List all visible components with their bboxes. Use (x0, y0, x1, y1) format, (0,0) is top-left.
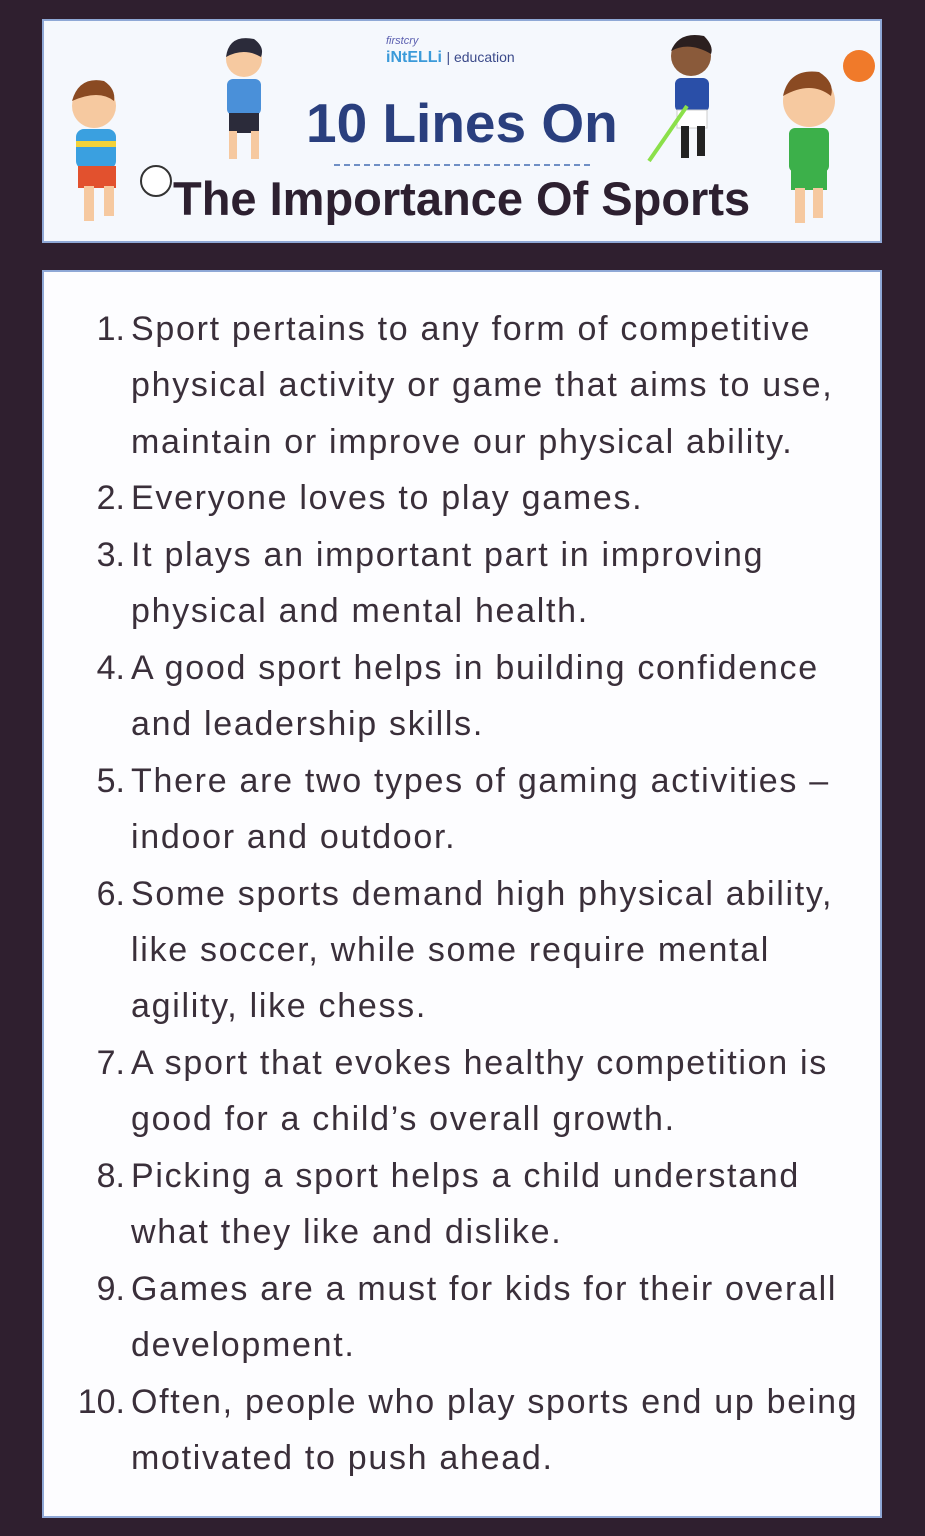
item 10 (78, 1383, 858, 1477)
logo: firstcry (386, 35, 418, 47)
item 8 (97, 1157, 800, 1251)
item 8: what they like and dislike. (131, 1213, 562, 1251)
item 9 (97, 1270, 837, 1364)
item 7 (97, 1044, 828, 1138)
title line 2: The Importance Of Sports (173, 172, 750, 225)
item 10: 10. (78, 1383, 125, 1421)
item 6: Some sports demand high physical ability, (131, 875, 833, 913)
item 1: maintain or improve our physical ability. (131, 423, 793, 461)
icon: soccer kid (72, 80, 172, 221)
item 3: physical and mental health. (131, 592, 589, 630)
item 3 (97, 536, 764, 630)
item 1: 1. (97, 310, 125, 348)
item 6: 6. (97, 875, 125, 913)
item 3: It plays an important part in improving (131, 536, 764, 574)
item 9: Games are a must for kids for their overall (131, 1270, 837, 1308)
item 5: 5. (97, 762, 125, 800)
item 4: A good sport helps in building confidence (131, 649, 819, 687)
item 4: and leadership skills. (131, 705, 484, 743)
item 1 (97, 310, 833, 461)
item 10: motivated to push ahead. (131, 1439, 554, 1477)
content panel (42, 270, 882, 1518)
item 2: Everyone loves to play games. (131, 479, 643, 517)
icon: basketball kid (783, 50, 875, 223)
icon: hockey girl (647, 35, 712, 162)
item 7: 7. (97, 1044, 125, 1082)
item 6: agility, like chess. (131, 987, 427, 1025)
logo (386, 35, 515, 66)
item 6 (97, 875, 833, 1025)
item 7: A sport that evokes healthy competition is (131, 1044, 828, 1082)
item 5: There are two types of gaming activities – (131, 762, 830, 800)
item 5: indoor and outdoor. (131, 818, 456, 856)
item 1: physical activity or game that aims to use, (131, 366, 833, 404)
item 9: development. (131, 1326, 356, 1364)
icon: running kid (226, 38, 262, 159)
logo: iNtELLi | education (386, 49, 515, 66)
title line 1: 10 Lines On (306, 92, 618, 154)
item 8: 8. (97, 1157, 125, 1195)
item 7: good for a child’s overall growth. (131, 1100, 676, 1138)
item 9: 9. (97, 1270, 125, 1308)
item 6: like soccer, while some require mental (131, 931, 770, 969)
item 1: Sport pertains to any form of competitive (131, 310, 811, 348)
item 10: Often, people who play sports end up being (131, 1383, 858, 1421)
item 4: 4. (97, 649, 125, 687)
item 3: 3. (97, 536, 125, 574)
item 4 (97, 649, 819, 743)
numbered list (78, 310, 858, 1477)
item 5 (97, 762, 830, 856)
item 2: 2. (97, 479, 125, 517)
header panel (42, 19, 882, 243)
dashed divider (334, 164, 590, 166)
item 8: Picking a sport helps a child understand (131, 1157, 800, 1195)
